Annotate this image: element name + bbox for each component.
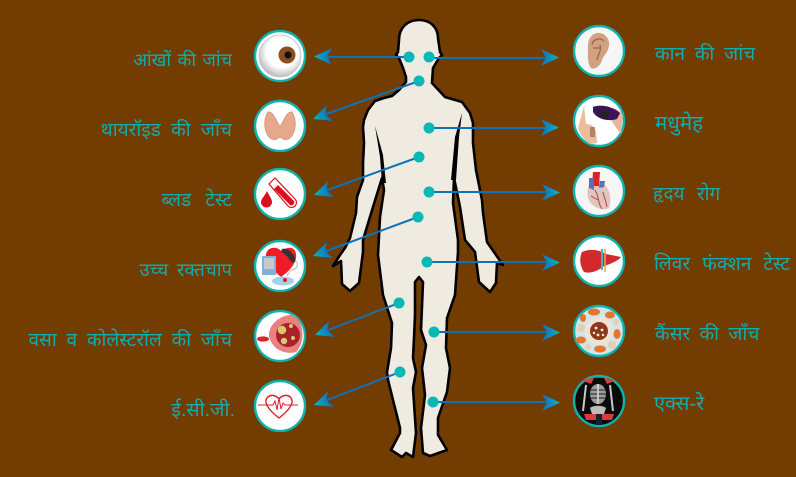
icon: cancer cells	[574, 306, 624, 356]
icon: heart anatomy	[574, 166, 624, 216]
icon: ecg heart	[255, 381, 305, 431]
icon: eye	[255, 31, 305, 81]
icon: diabetes glucose meter	[574, 96, 624, 146]
label: ECG: ई.सी.जी.	[171, 398, 235, 421]
label: liver function test: लिवर फंक्शन टेस्ट	[654, 252, 790, 275]
icon: thyroid	[255, 101, 305, 151]
icon: liver	[574, 236, 624, 286]
label: blood test: ब्लड टेस्ट	[162, 188, 232, 211]
organ point dots	[394, 52, 440, 408]
connector lines	[321, 57, 550, 402]
label: fat and cholesterol test: वसा व कोलेस्टरॉल की जाँच	[28, 328, 233, 351]
icon: blood test tube	[255, 169, 305, 219]
label: thyroid test: थायरॉइड की जाँच	[101, 118, 233, 141]
icon: ear	[574, 26, 624, 76]
icon: blood pressure	[255, 241, 305, 291]
icon: artery with cholesterol	[255, 311, 305, 361]
label: diabetes: मधुमेह	[655, 111, 704, 136]
label: eye test: आंखों की जांच	[133, 49, 233, 70]
label: x-ray: एक्स-रे	[654, 391, 705, 415]
icon: x-ray	[574, 376, 624, 426]
human body figure	[333, 20, 503, 457]
label: ear test: कान की जांच	[655, 42, 756, 65]
label: heart disease: हृदय रोग	[653, 183, 721, 205]
label: cancer test: कैंसर की जाँच	[655, 322, 760, 345]
arrowheads	[310, 48, 560, 413]
label: high blood pressure: उच्च रक्तचाप	[139, 259, 232, 280]
